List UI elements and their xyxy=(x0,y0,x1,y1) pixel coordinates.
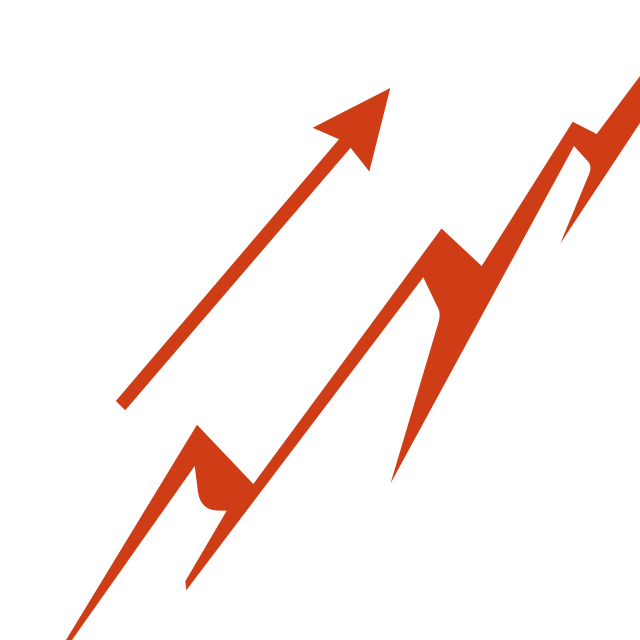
zigzag: rising lightning shape xyxy=(66,76,640,640)
arrow: upward diagonal xyxy=(116,88,390,410)
